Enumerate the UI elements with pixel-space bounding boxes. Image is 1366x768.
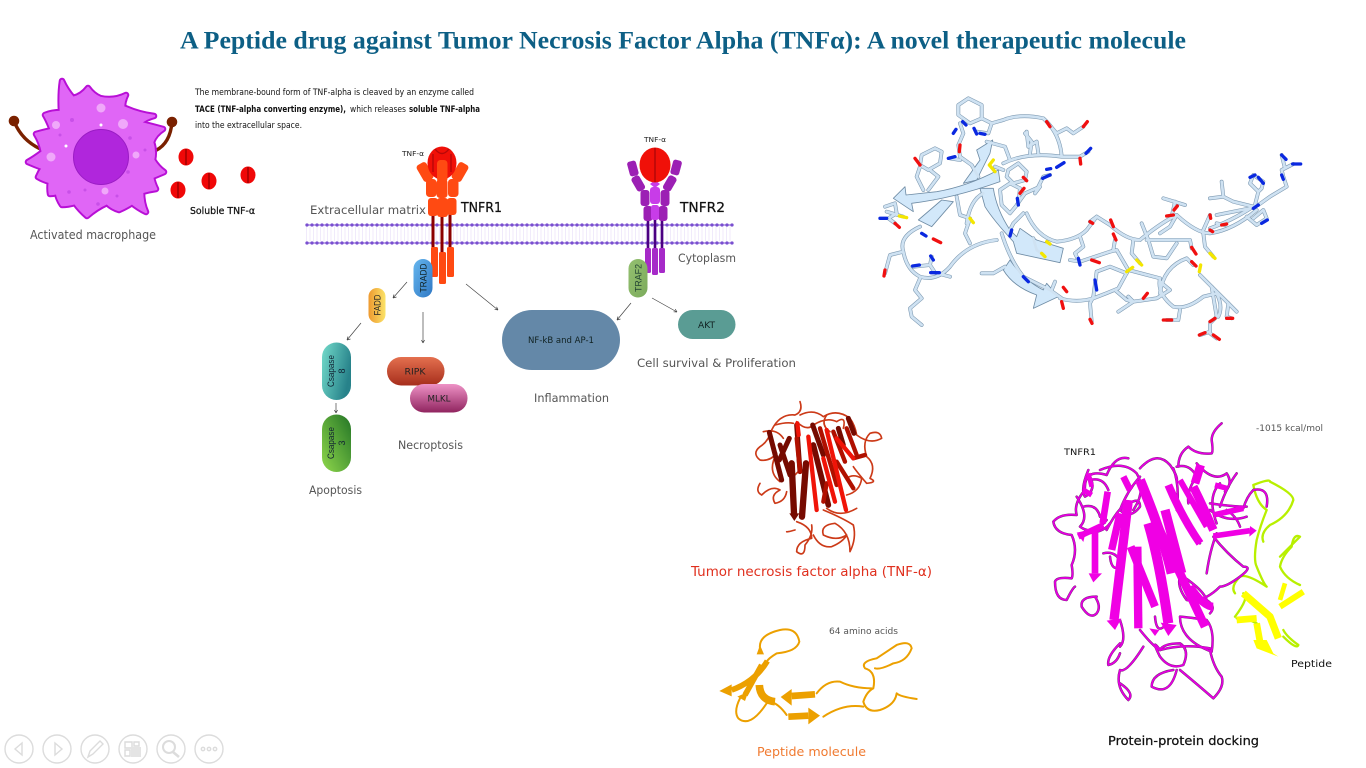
Caspase 3 pill	[322, 414, 351, 472]
TNF-alpha trimer on TNFR1	[428, 146, 456, 180]
pen button	[81, 735, 109, 763]
oxygen atoms	[884, 122, 1233, 339]
TNFR1 docking label: TNFR1	[1063, 448, 1096, 458]
receptor beta strands	[1078, 465, 1250, 628]
sheet arrows	[893, 140, 1063, 308]
slides button	[119, 735, 147, 763]
TRADD pill: TRADD	[418, 263, 428, 292]
panel: activated macrophage	[9, 81, 177, 242]
explanation text block: soluble TNF-alpha	[409, 104, 480, 114]
TRAF2 pill: TRAF2	[634, 264, 644, 292]
soluble TNF-alpha particles	[170, 148, 256, 198]
explanation text block	[194, 87, 480, 130]
peptide strands	[732, 661, 815, 717]
TRADD pill	[414, 259, 432, 298]
TNF-alpha caption: Tumor necrosis factor alpha (TNF-α)	[690, 565, 932, 580]
receptor loop outlines	[1053, 423, 1267, 700]
soluble TNF-alpha label: Soluble TNF-α	[190, 206, 255, 217]
TNF-alpha bright strands	[797, 423, 853, 510]
protein-protein docking complex	[1053, 423, 1303, 700]
peptide loops	[736, 629, 917, 721]
nitrogen atoms	[880, 122, 1301, 290]
Caspase 3 pill: Csapase	[326, 427, 336, 459]
MLKL pill	[410, 384, 468, 412]
RIPK pill	[387, 357, 444, 386]
Caspase 8 pill	[322, 342, 351, 400]
title: A Peptide drug against Tumor Necrosis Factor Alpha (TNFα): A novel therapeutic molecule	[180, 28, 1186, 54]
inflammation label: Inflammation	[534, 391, 609, 405]
peptide 3D stick structure	[880, 98, 1301, 339]
sulfur atoms	[899, 160, 1215, 272]
64 amino acids label: 64 amino acids	[829, 627, 899, 637]
peptide docking label: Peptide	[1291, 659, 1332, 670]
FADD pill: FADD	[372, 294, 382, 316]
TNF-alpha mid-red strands	[797, 428, 865, 502]
search button	[157, 735, 185, 763]
next button	[43, 735, 71, 763]
TNFR1 cytoplasmic tails	[431, 247, 454, 284]
macrophage caption: Activated macrophage	[30, 228, 156, 242]
Caspase 8 pill: Csapase	[326, 355, 336, 387]
RIPK pill: RIPK	[404, 368, 427, 378]
more button	[195, 735, 223, 763]
docked peptide strands	[1237, 583, 1303, 642]
cytoplasm label: Cytoplasm	[678, 251, 736, 265]
macrophage arms	[9, 116, 177, 152]
explanation text block: The membrane-bound form of TNF-alpha is cleaved by an enzyme called	[194, 87, 474, 97]
TNFR2 extracellular domains	[627, 159, 682, 221]
receptor loops	[1053, 423, 1267, 700]
macrophage vesicles	[46, 104, 146, 206]
cell survival label: Cell survival & Proliferation	[637, 356, 796, 370]
TNFR1 label: TNFR1	[460, 200, 502, 216]
extracellular matrix label: Extracellular matrix	[310, 203, 426, 217]
TNFR1 extracellular domains	[415, 161, 470, 217]
FADD pill	[368, 288, 386, 323]
peptide molecule caption: Peptide molecule	[757, 744, 866, 759]
necroptosis label: Necroptosis	[398, 438, 463, 452]
Caspase 8 pill: 8	[337, 368, 347, 374]
NF-kB and AP-1 pill	[502, 310, 620, 370]
AKT pill	[678, 310, 736, 339]
apoptosis label: Apoptosis	[309, 483, 362, 497]
TNFR1 receptor with TNF-alpha	[401, 146, 470, 284]
TRAF2 pill	[628, 259, 648, 298]
macrophage cell body	[28, 81, 164, 216]
slideshow navigation buttons	[5, 735, 223, 763]
MLKL pill: MLKL	[428, 394, 450, 404]
TNF-alpha label right: TNF-α	[643, 135, 666, 144]
explanation text block: into the extracellular space.	[195, 120, 302, 130]
explanation text block: which releases	[350, 104, 406, 114]
TNF-alpha dark strands	[769, 418, 854, 517]
Caspase 3 pill: 3	[337, 440, 347, 446]
docked peptide loops	[1233, 481, 1300, 646]
stick fill	[885, 98, 1293, 338]
signalling arrows	[334, 282, 677, 413]
strand arrowheads	[1077, 526, 1257, 636]
cell membrane	[306, 225, 733, 243]
docking caption: Protein-protein docking	[1108, 733, 1259, 748]
explanation text block: TACE (TNF-alpha converting enzyme),	[195, 104, 346, 114]
peptide molecule ribbon	[719, 629, 917, 724]
TNFR1 transmembrane stems	[433, 212, 450, 252]
binding energy label: -1015 kcal/mol	[1256, 424, 1323, 434]
macrophage nucleus	[74, 130, 128, 184]
TNFR2 receptor with TNF-alpha	[627, 135, 682, 275]
TNF-alpha loops	[756, 402, 882, 554]
TNF-alpha trimer on TNFR2	[640, 148, 670, 182]
AKT pill: AKT	[698, 321, 716, 331]
TNFR2 label: TNFR2	[679, 200, 725, 216]
TNFR2 cytoplasmic tails	[645, 248, 665, 275]
TNF-alpha ribbon structure	[756, 402, 882, 554]
stick outlines	[885, 98, 1293, 338]
NF-kB and AP-1 pill: NF-kB and AP-1	[528, 336, 594, 346]
TNF-alpha label left: TNF-α	[401, 149, 424, 158]
previous button	[5, 735, 33, 763]
TNFR2 transmembrane stems	[648, 215, 662, 250]
